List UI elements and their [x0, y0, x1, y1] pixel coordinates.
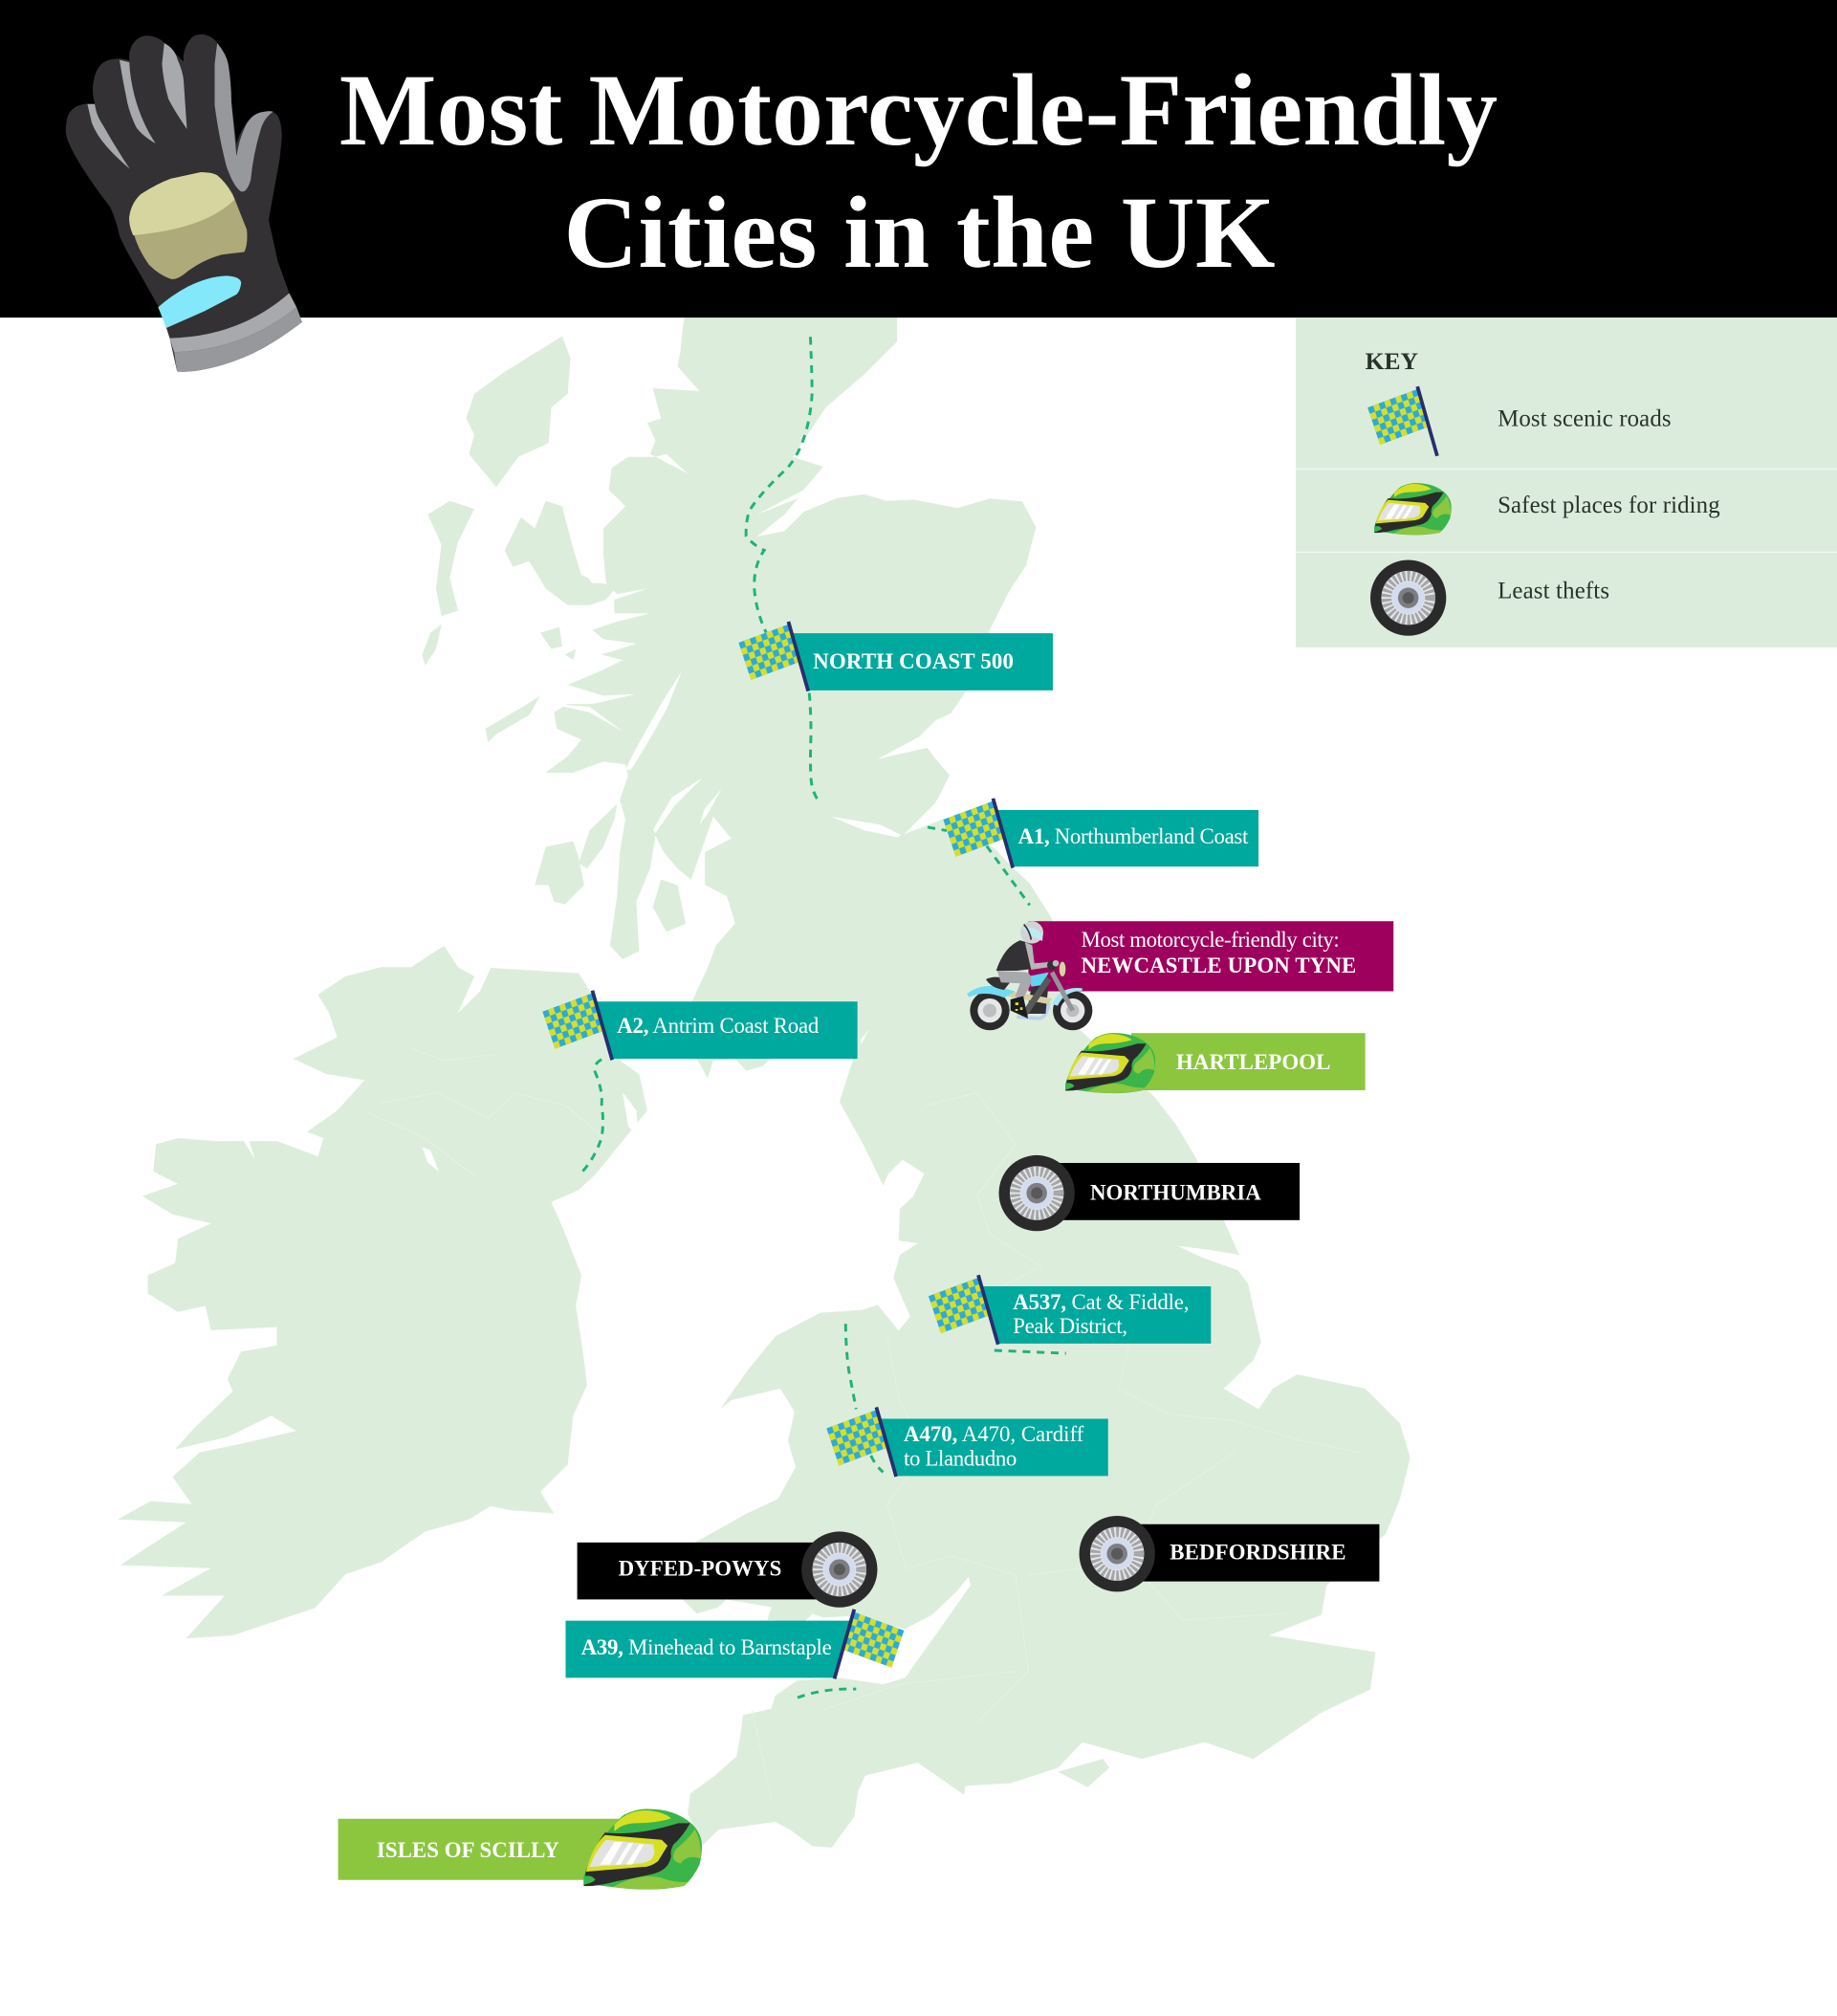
label: A470: A470, A470, Cardiff: [904, 1422, 1084, 1446]
label: A2: [542, 991, 858, 1060]
title: Most Motorcycle-Friendly: [339, 54, 1498, 167]
label: A1: A1, Northumberland Coast: [1018, 824, 1249, 848]
label: Bedfordshire: BEDFORDSHIRE: [1170, 1541, 1345, 1565]
header band: [0, 0, 1837, 318]
label: Isles of Scilly: ISLES OF SCILLY: [377, 1838, 559, 1862]
callout: Newcastle upon Tyne: [1028, 921, 1393, 992]
title: [339, 54, 1498, 290]
label: A537: Peak District,: [1013, 1314, 1127, 1338]
key text: safest: Safest places for riding: [1498, 493, 1720, 518]
label: Hartlepool: HARTLEPOOL: [1176, 1050, 1330, 1074]
key text: scenic: Most scenic roads: [1498, 406, 1672, 432]
label: Dyfed-Powys: DYFED-POWYS: [619, 1557, 781, 1581]
road: A39: [798, 1689, 856, 1698]
label: Northumbria: NORTHUMBRIA: [1090, 1180, 1261, 1204]
label: Northumbria: [999, 1155, 1300, 1231]
callout: Newcastle upon Tyne: NEWCASTLE UPON TYNE: [1082, 953, 1356, 977]
map of UK and Ireland: [118, 315, 1411, 1848]
label: A470: to Llandudno: [904, 1447, 1017, 1471]
road: A1: [928, 827, 1030, 905]
key icon: flag: [1367, 386, 1437, 456]
label: A1: [943, 799, 1258, 867]
label: Bedfordshire: [1080, 1516, 1379, 1591]
key icon: helmet: [1374, 483, 1452, 535]
county borders: [366, 1048, 1363, 1800]
label: A470: [826, 1407, 1108, 1477]
key text: thefts: Least thefts: [1498, 579, 1609, 604]
road: A2: [581, 1060, 602, 1172]
label: Hartlepool: [1065, 1033, 1366, 1093]
label: A2: A2, Antrim Coast Road: [617, 1014, 820, 1038]
Isle of Wight: [1058, 1759, 1109, 1787]
label: A39: [565, 1610, 904, 1678]
label: North Coast 500: [738, 622, 1053, 691]
label: A39: A39, Minehead to Barnstaple: [581, 1635, 832, 1659]
scenic road: North Coast 500: [581, 337, 1066, 1698]
icon: glove: [66, 34, 302, 372]
road: A537: [995, 1350, 1066, 1353]
road: North Coast 500 south: [809, 693, 818, 800]
key heading: KEY: [1366, 347, 1418, 375]
callout: Newcastle upon Tyne: Most motorcycle-friendly city:: [1082, 928, 1340, 952]
label: Isles of Scilly: [339, 1809, 702, 1890]
title: Cities in the UK: [563, 176, 1276, 290]
key icon: wheel: [1370, 559, 1446, 636]
Ireland: [118, 946, 647, 1638]
label: A537: A537, Cat & Fiddle,: [1013, 1290, 1189, 1314]
England and Wales: [683, 819, 1411, 1848]
road: A470: [845, 1324, 884, 1472]
panel: key: [1296, 318, 1837, 647]
icon: motorcycle and rider: [967, 921, 1092, 1030]
Scotland: [423, 315, 1036, 1079]
label: North Coast 500: NORTH COAST 500: [813, 649, 1014, 673]
label: Dyfed-Powys: [578, 1531, 877, 1608]
label: A537: [929, 1275, 1211, 1345]
